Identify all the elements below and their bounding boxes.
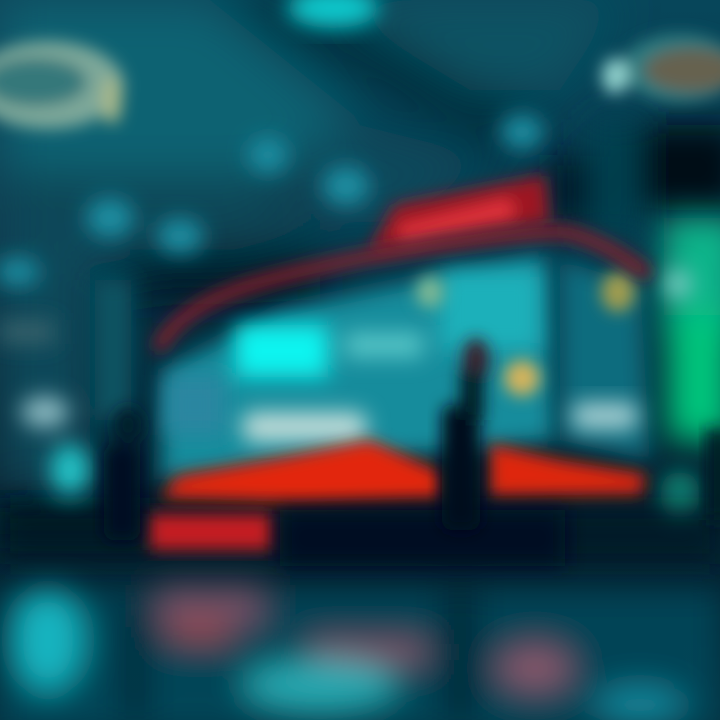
red canopy arch xyxy=(160,232,645,345)
booth back wall xyxy=(160,255,555,480)
yellow accents xyxy=(416,272,635,396)
silhouette: right figure xyxy=(442,338,489,530)
floor reflections xyxy=(0,585,720,720)
booth screens xyxy=(165,270,540,435)
red lower block xyxy=(150,514,272,550)
silhouette: left figure xyxy=(104,407,142,540)
booth white counter xyxy=(242,402,638,442)
booth side wall xyxy=(560,260,650,460)
dark floor center xyxy=(280,510,565,566)
red counter base xyxy=(160,440,645,502)
ceiling light: top cyan xyxy=(287,0,379,28)
dark ceiling corner at right xyxy=(550,120,720,240)
silhouette: far right figure xyxy=(706,430,720,520)
ceiling ring: right xyxy=(602,34,720,102)
dark floor band xyxy=(0,508,720,564)
ceiling and wall tones xyxy=(0,0,620,490)
green panel at right xyxy=(664,218,720,440)
red canopy sign xyxy=(368,175,550,252)
ceiling ring: left xyxy=(0,41,124,129)
ceiling spot lights xyxy=(0,114,544,286)
green panel highlights xyxy=(660,269,700,519)
left wall details xyxy=(0,280,150,541)
